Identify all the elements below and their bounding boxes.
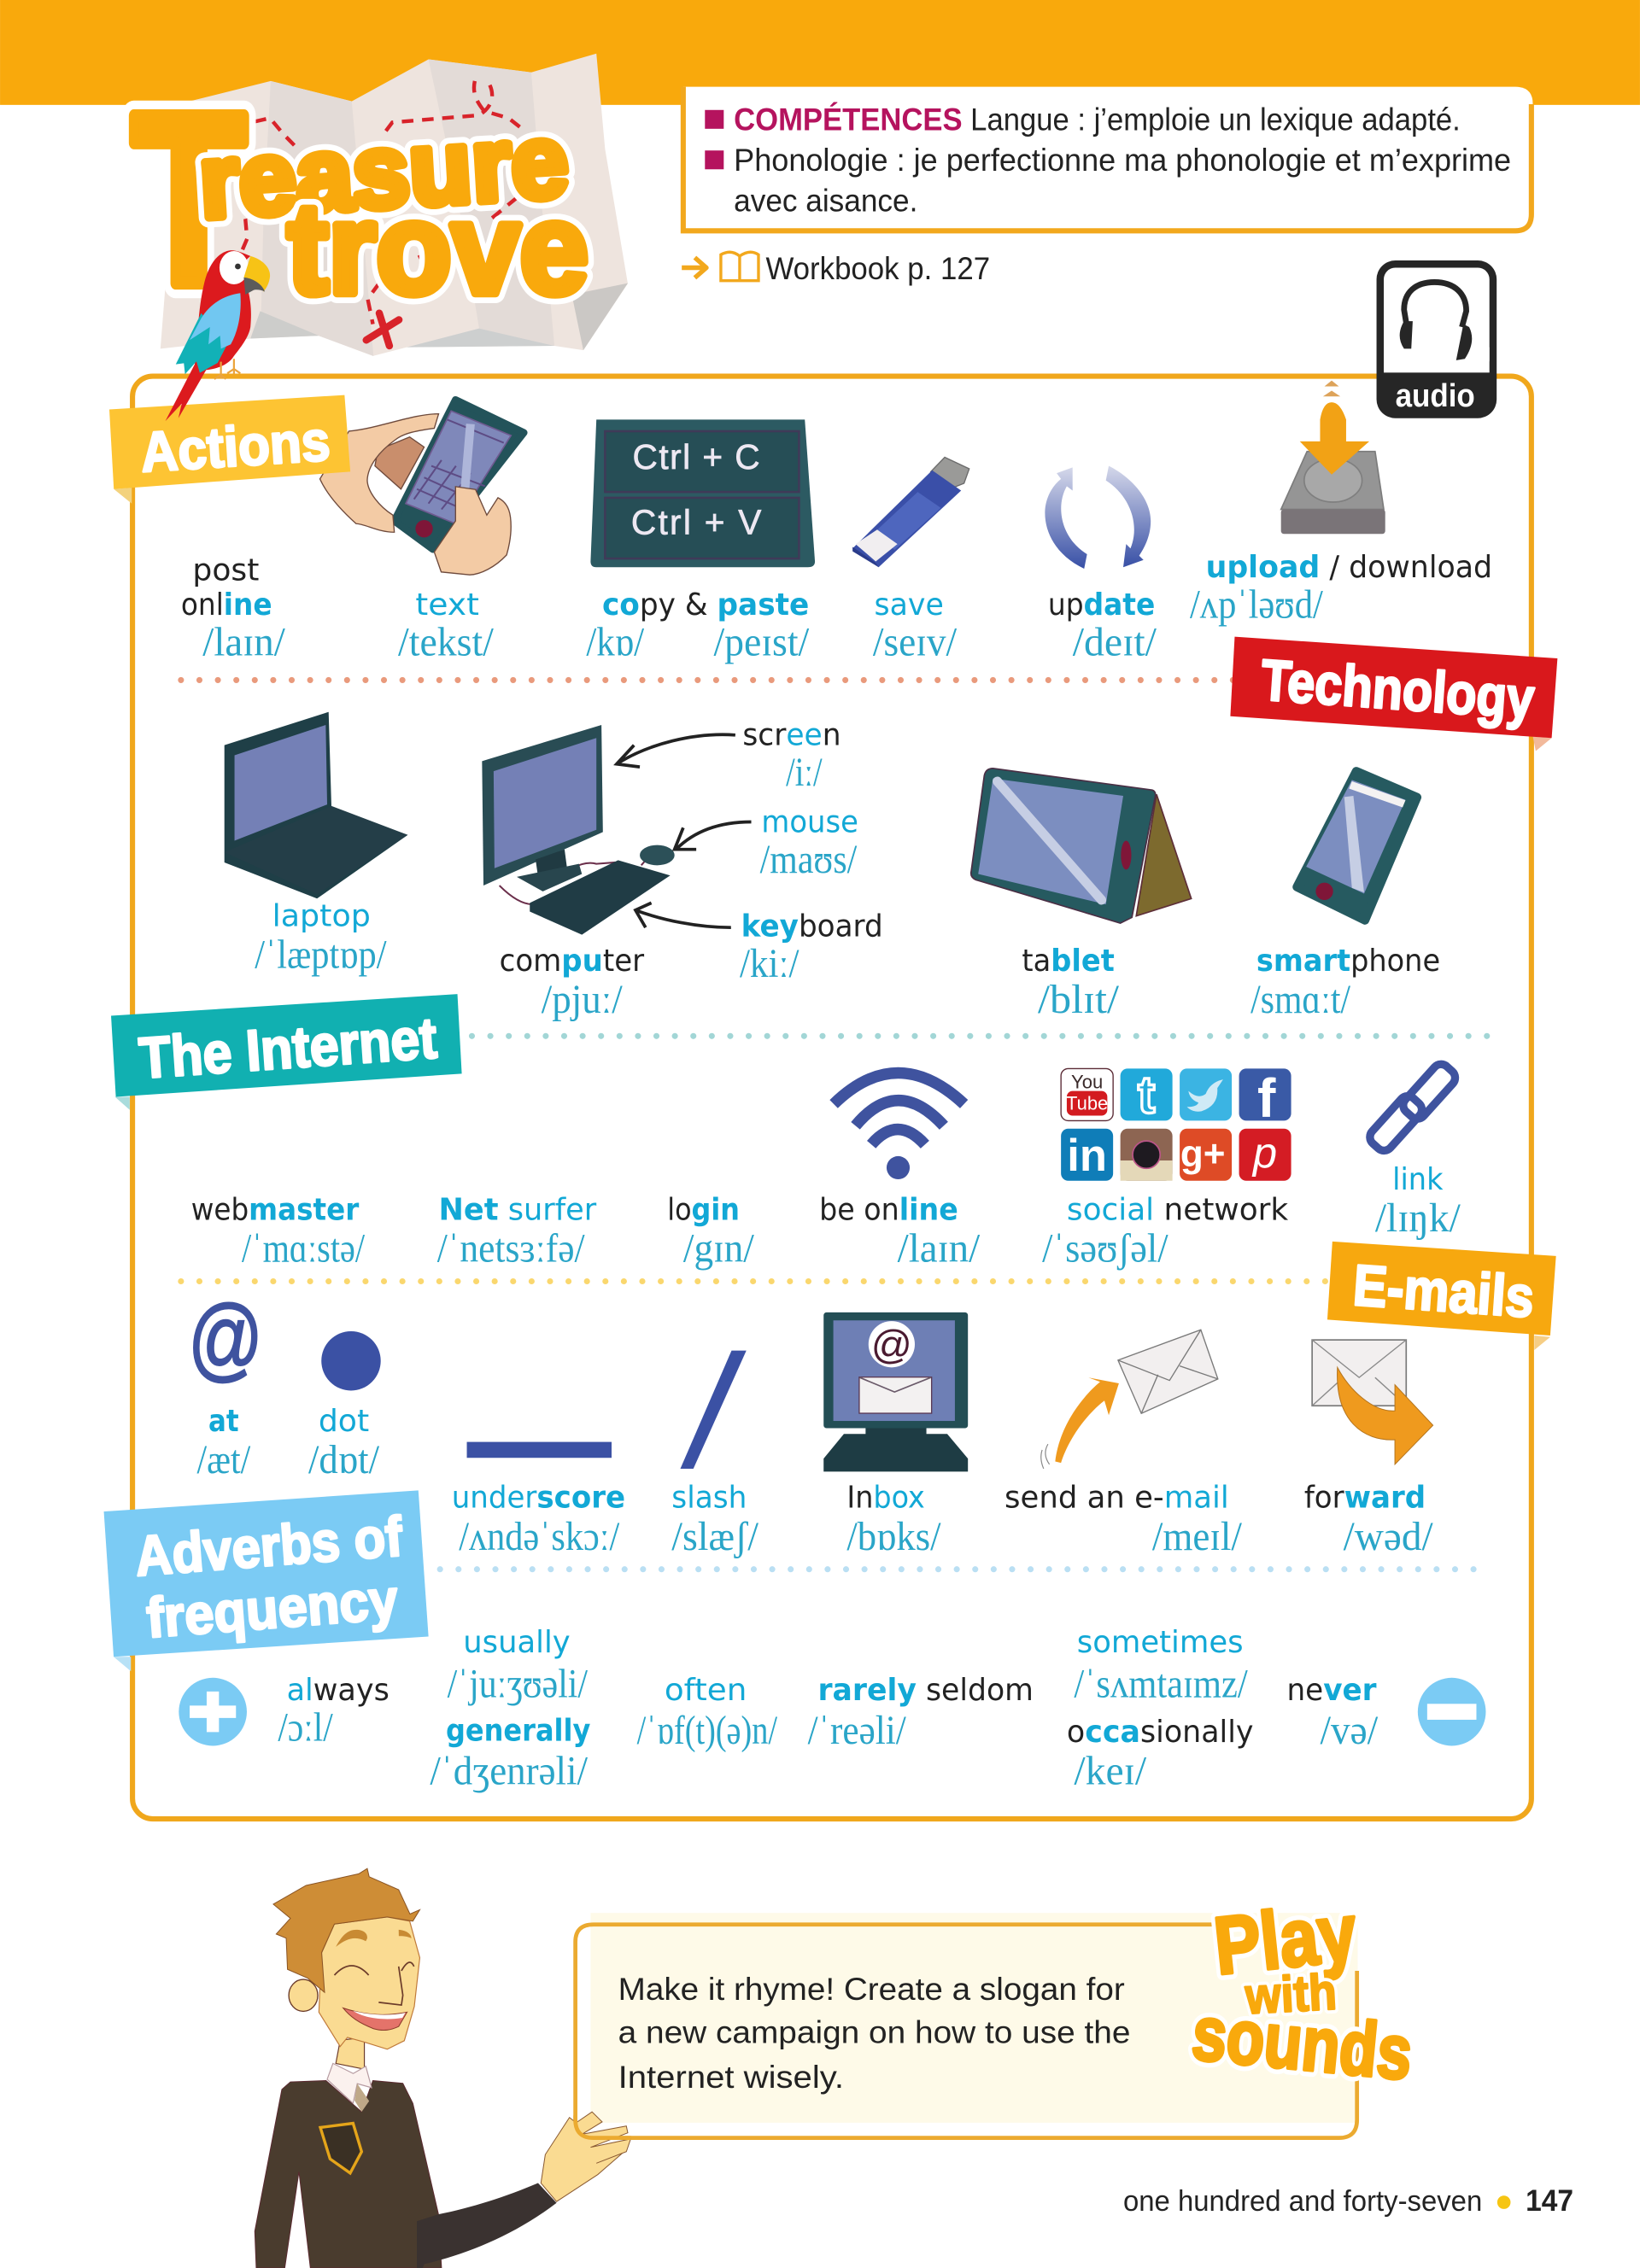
- face: [319, 1917, 419, 2049]
- icon: facebook: f: [1257, 1067, 1276, 1129]
- word: generally: [446, 1714, 590, 1749]
- sounds outline: sounds: [1189, 1990, 1416, 2096]
- icon: underscore: [467, 1442, 612, 1458]
- item: occasionally: [1067, 1715, 1254, 1793]
- phonetics: /laɪn/: [202, 621, 286, 665]
- word: save: save: [875, 587, 944, 623]
- phonetics: /ˈmɑːstə/: [242, 1227, 366, 1271]
- icon: usb stick: [852, 457, 969, 567]
- phonetics: /ˈdʒenrəli/: [430, 1749, 589, 1793]
- word: keyboard: keyboard: [741, 909, 883, 944]
- icon: inbox monitor: @: [871, 1323, 912, 1368]
- workbook reference: [682, 250, 990, 286]
- phonetics: /ʌndəˈskɔː/: [459, 1515, 620, 1559]
- icon: at sign: @: [187, 1287, 262, 1390]
- icon: desktop computer: [482, 725, 675, 935]
- word: rarely seldom: [817, 1673, 1034, 1708]
- word: copy & paste: copy & paste: [602, 587, 809, 623]
- icon: youtube: You: [1071, 1071, 1103, 1092]
- title word: T outline: T: [132, 63, 246, 335]
- phonetics: /ɔːl/: [278, 1706, 334, 1751]
- item: upload download: [1190, 381, 1492, 628]
- arm: [417, 2183, 557, 2268]
- phonologie lines: Phonologie : je perfectionne ma phonologie et m’exprime: [734, 142, 1511, 178]
- audio label: audio: [1396, 377, 1475, 414]
- banner: E-mails: E-mails: [1351, 1254, 1536, 1330]
- icon: youtube: Tube: [1066, 1093, 1108, 1114]
- word: social network: [1067, 1192, 1289, 1227]
- item: forward: [1304, 1340, 1433, 1559]
- callout: mouse: [675, 804, 858, 882]
- item: usually: [448, 1625, 589, 1707]
- with outline: with: [1243, 1963, 1338, 2025]
- word: upload / download: upload / download: [1206, 550, 1492, 585]
- item: link: [1367, 1061, 1461, 1241]
- eyebrows: [336, 1930, 412, 1947]
- activity text line 3: Internet wisely.: [618, 2059, 844, 2095]
- phonetics: /keɪ/: [1074, 1749, 1147, 1793]
- word: smartphone: smartphone: [1256, 944, 1440, 979]
- hair: [273, 1868, 419, 1992]
- icon group: social media logos: [1061, 1066, 1292, 1181]
- main vocabulary panel: [132, 377, 1532, 1819]
- item: login: [667, 1192, 755, 1271]
- icon: minus: [1418, 1678, 1485, 1745]
- hand: [541, 2112, 630, 2201]
- word: usually: [463, 1625, 571, 1660]
- icon: pinterest: p: [1251, 1128, 1277, 1177]
- icon: twitter bird: [1180, 1068, 1232, 1120]
- item: slash: [671, 1351, 759, 1559]
- item: update: [1045, 466, 1157, 665]
- banner: Actions: [109, 395, 350, 504]
- icon: hands holding smartphone: [320, 400, 524, 575]
- word: link: [1392, 1162, 1444, 1197]
- item: copy and paste: [586, 419, 815, 665]
- character: smiling boy: [255, 1868, 630, 2268]
- icon: ctrl keys: [590, 419, 815, 567]
- phonetics: copy: /kɒ/: [586, 621, 645, 665]
- word: text: text: [415, 587, 479, 623]
- word: at: [208, 1404, 239, 1439]
- word: slash: [671, 1481, 747, 1516]
- activity text line 1: Make it rhyme! Create a slogan for: [618, 1971, 1125, 2007]
- collar and tie: [327, 2063, 372, 2112]
- word: Inbox: [846, 1481, 925, 1516]
- header band: [0, 0, 1640, 105]
- item: underscore: [452, 1442, 625, 1559]
- phonetics: /iː/: [786, 751, 823, 795]
- word: webmaster: [191, 1192, 360, 1227]
- item: sometimes: [1074, 1625, 1248, 1707]
- icon: laptop: [225, 712, 407, 898]
- icon: chain link: [1367, 1061, 1459, 1154]
- footer dot: [1497, 2195, 1510, 2209]
- phonetics: /ˈjuːʒʊəli/: [448, 1663, 589, 1707]
- phonetics: /bɒks/: [846, 1515, 941, 1559]
- word: post: post: [192, 553, 259, 588]
- item: be online: [819, 1073, 981, 1271]
- icon: facebook: [1239, 1067, 1292, 1129]
- icon: linkedin: in: [1067, 1131, 1107, 1181]
- icon: inbox monitor: [823, 1312, 968, 1471]
- phonetics: paste: /peɪst/: [713, 621, 810, 665]
- word: never: [1286, 1673, 1377, 1708]
- icon: google plus: [1180, 1129, 1232, 1181]
- phonetics: /meɪl/: [1152, 1515, 1243, 1559]
- banner: Technology: Technology: [1259, 648, 1537, 731]
- icon: twitter t: [1121, 1066, 1173, 1124]
- sweater and left sleeve: [255, 2081, 442, 2268]
- phonetics: /laɪn/: [898, 1227, 981, 1271]
- activity box: [576, 1913, 1358, 2138]
- icon: twitter t: t: [1138, 1066, 1155, 1124]
- item: inbox: [823, 1312, 968, 1559]
- callout: keyboard: [636, 903, 883, 986]
- workbook text: Workbook p. 127: [765, 250, 990, 286]
- banner: Actions: Actions: [138, 410, 332, 484]
- audio badge: [1377, 260, 1496, 418]
- word: send an e-mail: [1004, 1481, 1229, 1516]
- icon: youtube: [1061, 1068, 1113, 1120]
- icon: ctrl keys: Ctrl + C: [633, 437, 760, 476]
- phonetics: /deɪt/: [1073, 621, 1157, 665]
- section separators: [181, 680, 1488, 1569]
- bullet square: [705, 110, 723, 129]
- activity text line 2: a new campaign on how to use the: [618, 2014, 1130, 2050]
- icon: arrow: [682, 258, 706, 278]
- phonetics: /tekst/: [398, 621, 495, 665]
- title word: trove outline: trove: [287, 176, 589, 320]
- item: laptop: [225, 712, 407, 978]
- word: computer: computer: [500, 944, 644, 979]
- page footer: [1123, 2183, 1573, 2218]
- word: often: [665, 1673, 747, 1708]
- item: smartphone: [1250, 771, 1440, 1022]
- item: often: [637, 1673, 778, 1753]
- phonetics: /ˈsʌmtaɪmz/: [1074, 1663, 1248, 1707]
- callout: screen: [617, 718, 841, 795]
- title word: trove fill: trove: [287, 176, 589, 320]
- Play fill: Play: [1210, 1887, 1361, 1992]
- eyes and nose: [334, 1962, 414, 2005]
- phonetics: /slæʃ/: [671, 1515, 759, 1559]
- logo: Play with sounds: [1189, 1887, 1416, 2096]
- teeth: [353, 2011, 406, 2019]
- phonetics: /ˈreəli/: [808, 1709, 907, 1753]
- phonetics: /ʌpˈləʊd/: [1190, 583, 1324, 628]
- phonetics: /smɑːt/: [1250, 978, 1351, 1022]
- icon: hard drive with arrow: [1281, 381, 1385, 534]
- crest: [320, 2124, 361, 2173]
- competences line: COMPÉTENCES Langue : j’emploie un lexique adapté.: [734, 102, 1461, 137]
- word: mouse: mouse: [761, 804, 858, 839]
- word: occasionally: [1067, 1715, 1254, 1750]
- phonetics: /wəd/: [1344, 1515, 1433, 1559]
- banner: The Internet: The Internet: [138, 1006, 439, 1091]
- title word: T fill: T: [132, 63, 246, 335]
- item: social network: [1042, 1066, 1292, 1271]
- banner: E-mails: [1327, 1242, 1556, 1350]
- title: Treasure trove with map: [132, 54, 628, 356]
- activity box corner over the fingers: [576, 2115, 631, 2138]
- mouth: [343, 2008, 407, 2031]
- phonetics: /maʊs/: [760, 838, 858, 882]
- treasure map: [161, 54, 628, 356]
- title word: reasure outline: reasure: [196, 102, 571, 240]
- word: sometimes: [1077, 1625, 1244, 1660]
- competences box: [683, 87, 1533, 231]
- icon: wifi: [834, 1073, 964, 1179]
- item: post online: [181, 553, 286, 665]
- item: computer: [482, 725, 675, 1022]
- phonetics: /ˈsəʊʃəl/: [1042, 1227, 1168, 1271]
- icon: instagram: [1121, 1129, 1173, 1181]
- icon: pinterest: [1239, 1128, 1292, 1181]
- icon: ctrl keys: Ctrl + V: [631, 502, 761, 541]
- icon: tablet: [971, 769, 1192, 923]
- with fill: with: [1243, 1963, 1338, 2025]
- arrow: [636, 903, 731, 927]
- phonetics: /dɒt/: [308, 1438, 380, 1482]
- banner: Technology: [1230, 637, 1557, 751]
- item: never: [1286, 1673, 1379, 1753]
- item: text: [320, 400, 524, 665]
- icon: forward envelope with arrow: [1312, 1340, 1433, 1464]
- icon: refresh arrows: [1045, 466, 1151, 569]
- item: rarely seldom: [808, 1673, 1034, 1753]
- page number: 147: [1526, 2183, 1573, 2218]
- neck: [336, 2037, 365, 2069]
- banner line 2: frequency: [144, 1568, 401, 1651]
- item: send an e-mail: [1004, 1330, 1243, 1559]
- phonologie second line: avec aisance.: [734, 182, 917, 218]
- icon: google plus: g+: [1180, 1133, 1226, 1175]
- phonetics: /gɪn/: [683, 1227, 755, 1271]
- footer text: one hundred and forty-seven: [1123, 2185, 1482, 2218]
- word: login: [667, 1192, 740, 1227]
- sounds fill: sounds: [1189, 1990, 1416, 2096]
- item: tablet: [971, 769, 1192, 1022]
- word: always: [287, 1673, 390, 1708]
- bullet square: [705, 150, 723, 169]
- arrow: [675, 821, 752, 850]
- word: update: update: [1048, 587, 1155, 623]
- item: generally: [430, 1714, 590, 1793]
- phonetics: /blɪt/: [1038, 978, 1120, 1022]
- phonetics: /æt/: [197, 1438, 251, 1482]
- phonetics: /kiː/: [740, 942, 800, 986]
- arrow: [617, 734, 735, 767]
- icon: headphones: [1400, 282, 1472, 360]
- word: be online: [819, 1192, 958, 1227]
- phonetics: /ˈnetsɜːfə/: [437, 1227, 585, 1271]
- item: Net surfer: [437, 1192, 597, 1271]
- phonetics: /seɪv/: [873, 621, 958, 665]
- phonetics: /lɪŋk/: [1375, 1196, 1461, 1241]
- banner: Adverbs of frequency: [104, 1490, 429, 1671]
- icon: plus: [179, 1678, 247, 1745]
- word: online: online: [181, 587, 272, 623]
- item: at: [187, 1287, 262, 1482]
- word: laptop: laptop: [272, 898, 371, 933]
- icon: slash: [680, 1351, 747, 1469]
- icon: parrot: [166, 250, 270, 421]
- phonetics: /ˈɒf(t)(ə)n/: [637, 1709, 778, 1753]
- icon: smartphone: [1297, 771, 1417, 921]
- item: save: [852, 457, 969, 665]
- word: tablet: tablet: [1022, 944, 1115, 979]
- icon: flying envelope and arrow: [1041, 1330, 1218, 1469]
- banner line 1: Adverbs of: [133, 1505, 406, 1588]
- word: Net surfer: [438, 1192, 597, 1227]
- phonetics: /ˈlæptɒp/: [255, 933, 387, 978]
- word: dot: [319, 1404, 369, 1439]
- phonetics: /pjuː/: [542, 978, 623, 1022]
- banner: The Internet: [111, 994, 462, 1110]
- title word: reasure fill: reasure: [196, 102, 571, 240]
- ear: [289, 1979, 318, 2011]
- word: screen: screen: [742, 718, 841, 753]
- phonetics: /və/: [1320, 1709, 1379, 1753]
- item: dot: [308, 1331, 381, 1482]
- item: always: [278, 1673, 390, 1751]
- word: forward: [1304, 1481, 1426, 1516]
- item: webmaster: [191, 1192, 366, 1271]
- icon: book: [721, 252, 758, 281]
- word: underscore: [452, 1481, 625, 1516]
- icon: dot: [321, 1331, 381, 1390]
- Play outline: Play: [1210, 1887, 1361, 1992]
